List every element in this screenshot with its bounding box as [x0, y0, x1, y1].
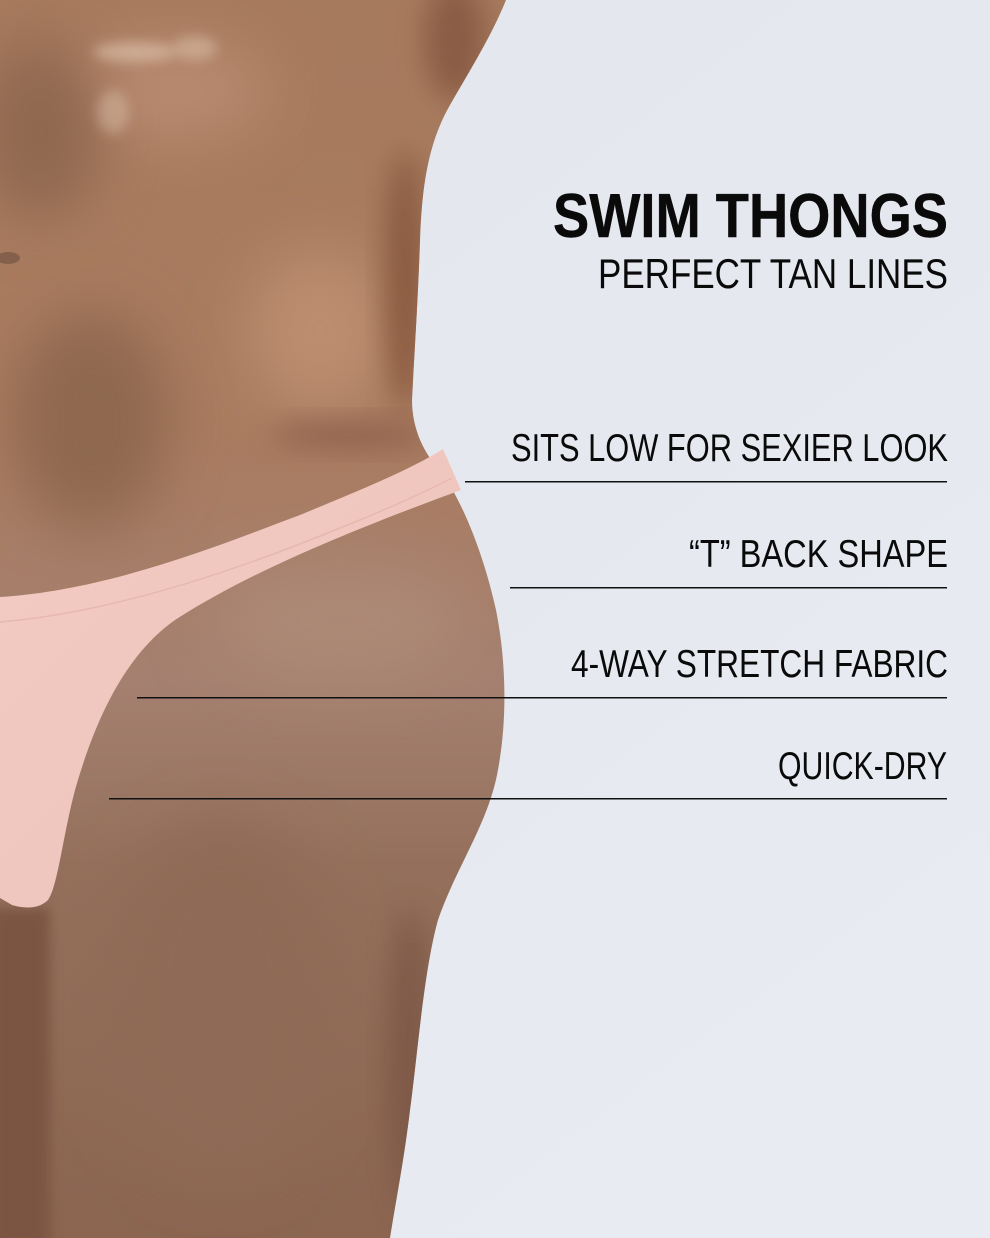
feature: T back shape: “T” BACK SHAPE — [689, 533, 948, 576]
waistband stitching — [0, 478, 452, 622]
photo: figure wearing pink swimwear — [0, 0, 506, 1238]
torso and leg silhouette — [0, 0, 506, 1238]
feature: quick-dry: QUICK-DRY — [778, 745, 947, 788]
shading and highlights — [0, 0, 485, 1238]
pink swimwear — [0, 449, 461, 907]
